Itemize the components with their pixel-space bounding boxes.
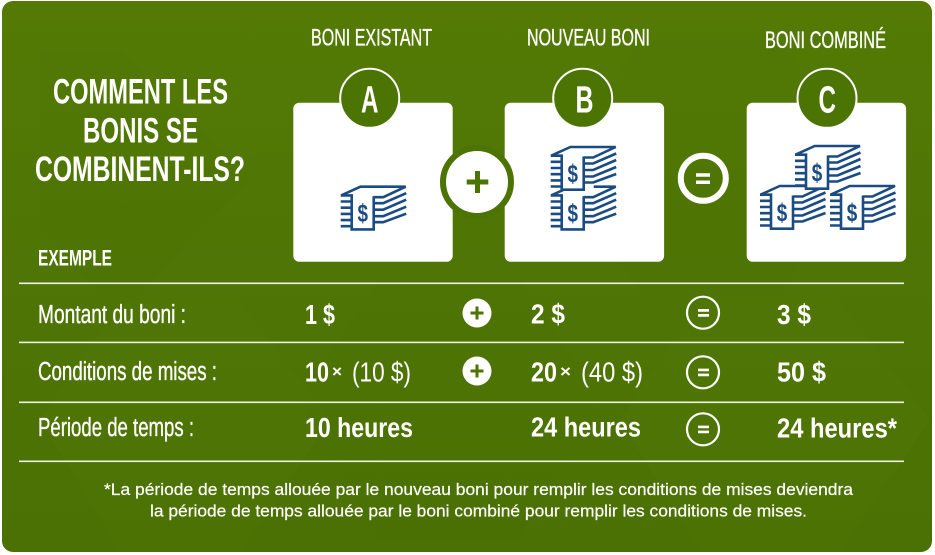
icon: money stacks C: $ bbox=[847, 199, 857, 227]
row: conditions de mises: × bbox=[332, 362, 342, 381]
footnote bbox=[104, 481, 854, 520]
footnote: *La période de temps allouée par le nouveau boni pour remplir les conditions de mises deviendra bbox=[104, 481, 854, 499]
title: COMBINENT-ILS? bbox=[35, 149, 245, 189]
icon: small equals bbox=[687, 356, 719, 388]
footnote: la période de temps allouée par le boni combiné pour remplir les conditions de mises. bbox=[150, 502, 807, 520]
row: conditions de mises: × bbox=[560, 362, 571, 381]
title: BONIS SE bbox=[83, 110, 198, 150]
card B bbox=[505, 103, 664, 262]
row: montant du boni: Montant du boni : bbox=[38, 301, 186, 329]
icon: small plus bbox=[462, 356, 492, 386]
icon: large equals bbox=[681, 156, 726, 201]
heading: boni existant: BONI EXISTANT bbox=[311, 25, 432, 52]
row: conditions de mises: (40 $) bbox=[581, 356, 643, 388]
row: conditions de mises: (10 $) bbox=[352, 356, 411, 388]
icon: small equals bbox=[687, 297, 719, 329]
icon: small equals bbox=[687, 413, 719, 445]
icon: money stack A: $ bbox=[358, 200, 368, 228]
row: conditions de mises: 10 bbox=[305, 356, 329, 388]
icon: large plus bbox=[443, 148, 511, 216]
icon: money stacks C: $ bbox=[777, 199, 787, 227]
icon: money stacks C bbox=[760, 145, 896, 230]
title: COMMENT LES bbox=[53, 72, 228, 112]
row: montant du boni: 2 $ bbox=[531, 298, 565, 329]
row: conditions de mises: 50 $ bbox=[777, 357, 826, 388]
badge C bbox=[798, 69, 856, 128]
card C bbox=[747, 103, 906, 262]
row: montant du boni: 1 $ bbox=[305, 299, 335, 330]
badge B bbox=[553, 69, 612, 128]
badge A bbox=[340, 69, 399, 128]
icon: money stacks B: $ bbox=[568, 200, 578, 228]
icon: money stacks B bbox=[551, 146, 617, 230]
label: exemple: EXEMPLE bbox=[38, 246, 112, 271]
icon: money stacks C: $ bbox=[812, 159, 822, 187]
icon: money stacks B: $ bbox=[568, 160, 578, 188]
icon: small plus bbox=[462, 298, 492, 328]
row: conditions de mises: Conditions de mises : bbox=[38, 358, 217, 386]
row: période de temps: 10 heures bbox=[305, 412, 413, 443]
row: période de temps bbox=[38, 412, 897, 445]
row: période de temps: Période de temps : bbox=[38, 414, 194, 442]
heading: nouveau boni: NOUVEAU BONI bbox=[527, 25, 650, 52]
row: montant du boni: 3 $ bbox=[777, 299, 811, 330]
badge A: A bbox=[361, 79, 378, 121]
row: période de temps: 24 heures bbox=[531, 412, 641, 443]
icon: money stack A bbox=[341, 186, 407, 230]
badge B: B bbox=[576, 79, 594, 121]
row: conditions de mises bbox=[38, 356, 826, 388]
card A bbox=[293, 103, 453, 262]
title bbox=[35, 72, 245, 189]
badge C: C bbox=[818, 80, 836, 122]
row: période de temps: 24 heures* bbox=[777, 412, 897, 444]
row: conditions de mises: 20 bbox=[531, 356, 557, 388]
row: montant du boni bbox=[38, 297, 811, 330]
